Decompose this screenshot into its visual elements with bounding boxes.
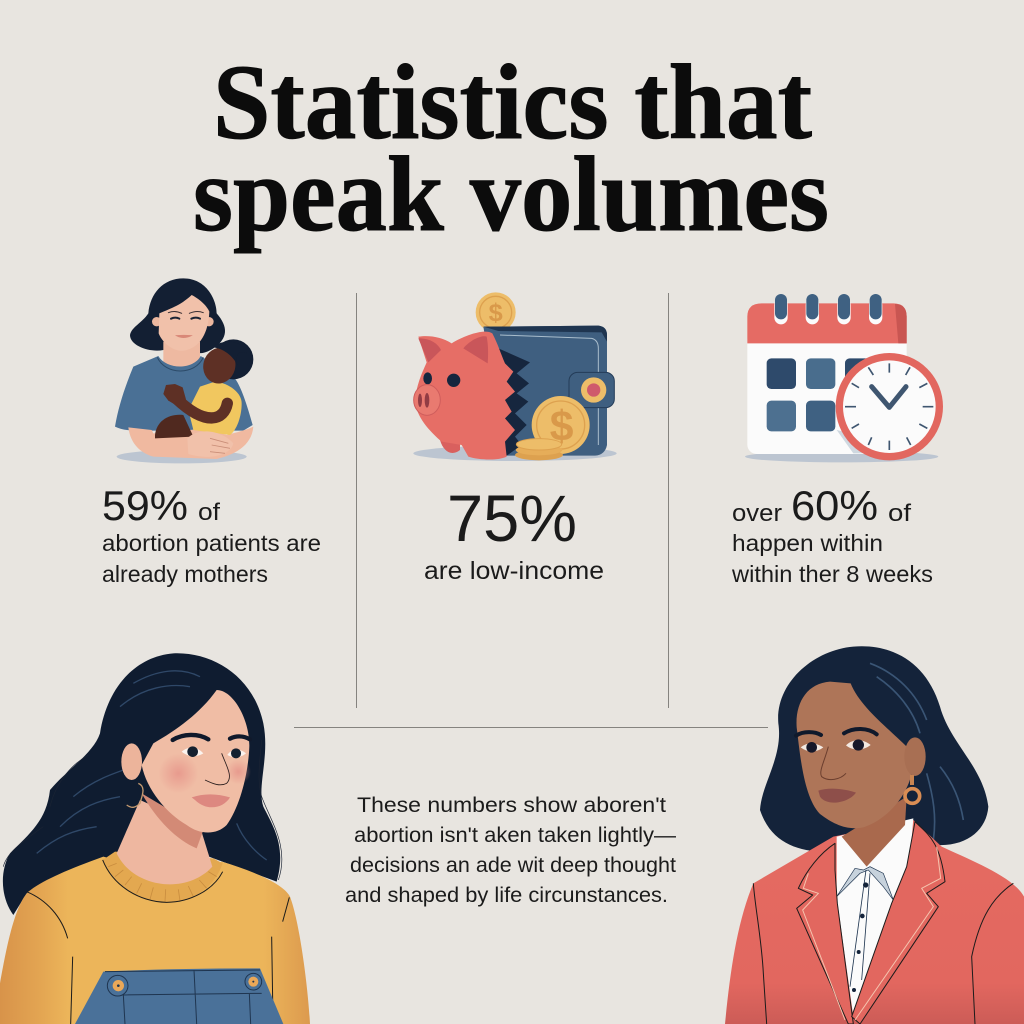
- closing statement: decisions an ade wit deep thought: [350, 854, 676, 877]
- stat: 59%: abortion patients are: [102, 530, 321, 556]
- closing statement: abortion isn't aken taken lightly—: [354, 824, 676, 847]
- illustration: woman in yellow sweater: [0, 653, 310, 1024]
- stat: over 60%: happen within: [732, 530, 883, 556]
- stat: 75%: 75%: [447, 481, 577, 555]
- closing statement: and shaped by life circunstances.: [345, 884, 668, 907]
- icon: piggy bank and wallet: $: [550, 402, 574, 450]
- icon: calendar with clock: [745, 294, 939, 462]
- stat: 59%: [102, 482, 321, 587]
- stat: over 60%: [731, 482, 933, 587]
- stat: 75%: [424, 481, 604, 585]
- stat: 59%: already mothers: [102, 561, 268, 587]
- title: [193, 44, 829, 254]
- stat: 59%: of: [198, 499, 220, 526]
- stat: over 60%: within ther 8 weeks: [731, 561, 933, 587]
- stat: 59%: 59%: [102, 482, 188, 529]
- title: speak volumes: [193, 136, 829, 254]
- title: Statistics that: [213, 44, 812, 162]
- closing statement: These numbers show aboren't: [357, 794, 666, 817]
- closing statement: [345, 794, 676, 907]
- stat: 75%: are low-income: [424, 557, 604, 585]
- icon: piggy bank and wallet: [413, 292, 617, 461]
- stat: over 60%: 60%: [791, 482, 878, 529]
- icon: piggy bank and wallet: $: [489, 299, 503, 327]
- stat: over 60%: over: [732, 500, 782, 527]
- stat: over 60%: of: [888, 500, 911, 527]
- icon: mother holding child: [115, 278, 253, 463]
- illustration: woman in coral blazer: [725, 646, 1024, 1024]
